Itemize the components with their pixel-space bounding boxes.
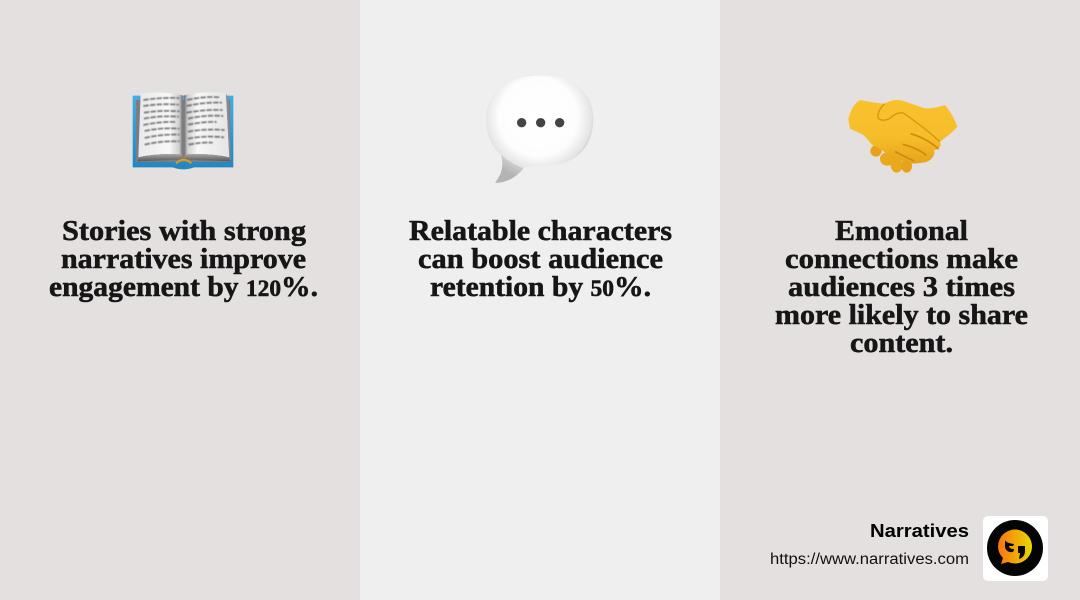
heading: right statistic: content. (850, 327, 953, 359)
heading: right statistic: audiences 3 times (788, 271, 1015, 303)
heading: middle statistic: Relatable characters (409, 215, 672, 247)
heading: left statistic: Stories with strong (62, 215, 307, 247)
heading: right statistic: Emotional (835, 215, 968, 247)
heading: right statistic: connections make (785, 243, 1018, 275)
heading: middle statistic: retention by 50%. (430, 271, 651, 303)
icon: handshake (848, 100, 957, 173)
heading: right statistic: more likely to share (775, 299, 1028, 331)
heading: middle statistic (409, 215, 672, 303)
heading: left statistic: narratives improve (61, 243, 306, 275)
heading: middle statistic: can boost audience (418, 243, 663, 275)
heading: left statistic (49, 215, 318, 303)
icon: open book (133, 92, 233, 169)
footer brand name: Narratives (870, 521, 969, 541)
heading: left statistic: engagement by 120%. (49, 271, 318, 303)
heading: right statistic (775, 215, 1028, 359)
panel: middle background (360, 0, 720, 600)
panel: right background (720, 0, 1080, 600)
logo: Narratives badge (983, 516, 1048, 581)
icon: speech bubble (486, 76, 593, 183)
panel: left background (0, 0, 360, 600)
footer url: https://www.narratives.com (770, 551, 969, 568)
